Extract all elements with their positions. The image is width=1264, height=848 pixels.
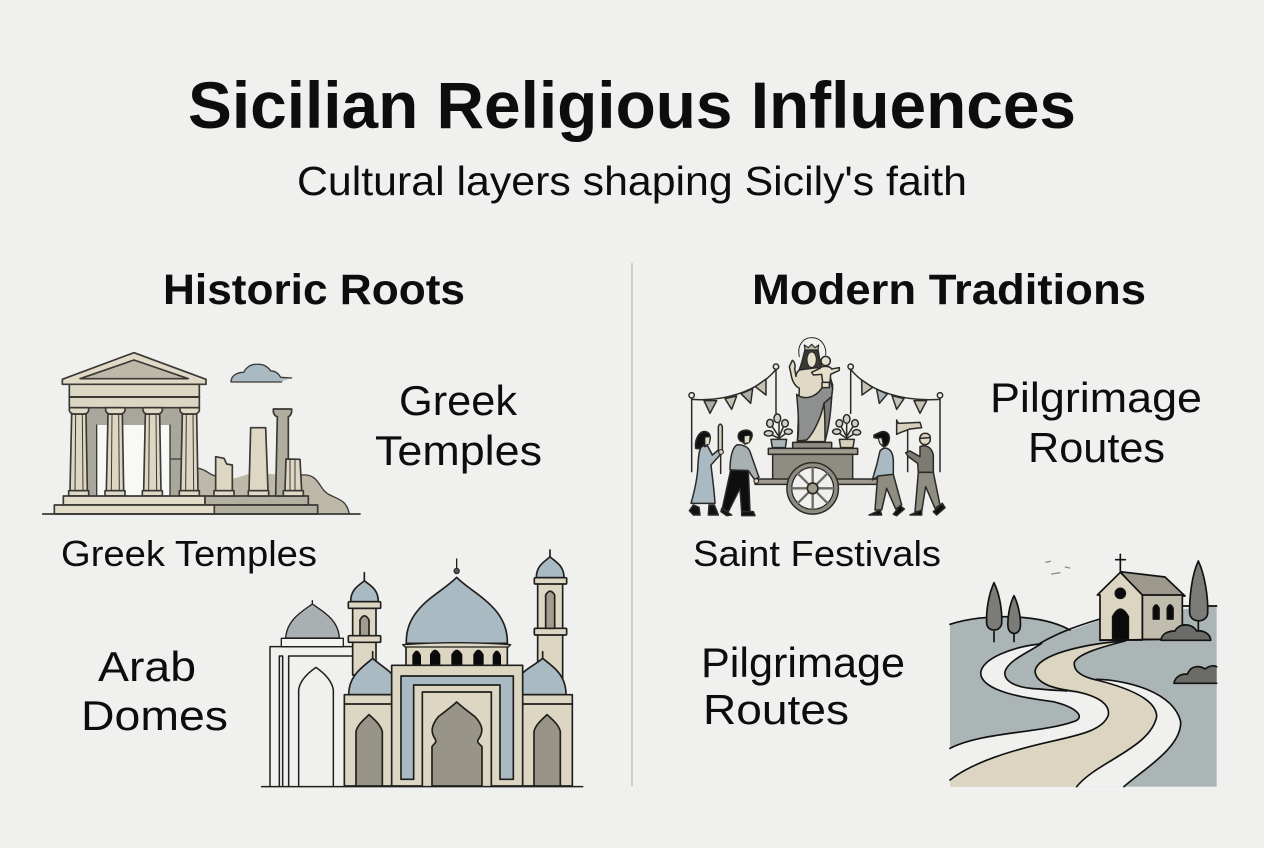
main dome xyxy=(455,559,459,568)
trees left xyxy=(987,583,1020,642)
cart xyxy=(755,442,888,514)
tree right xyxy=(1190,561,1208,632)
label: Greek Temples heading beside temple: Greek xyxy=(399,377,518,424)
man with banner xyxy=(897,420,945,515)
heading: Historic Roots: Historic Roots xyxy=(163,266,465,314)
right minaret xyxy=(534,550,567,680)
label: Pilgrimage Routes lower xyxy=(701,639,905,733)
central portal xyxy=(392,665,523,786)
bushes xyxy=(1161,625,1211,640)
caption: Saint Festivals: Saint Festivals xyxy=(693,533,941,574)
man pulling cart left xyxy=(721,430,759,516)
land xyxy=(950,605,1217,787)
label: Pilgrimage Routes top right: Pilgrimage xyxy=(990,374,1202,421)
winding paths xyxy=(950,641,1181,787)
side wings xyxy=(344,695,394,786)
icon: Greek temple and ruins xyxy=(43,353,360,514)
label: Greek Temples heading beside temple xyxy=(375,377,542,474)
icon: Arab domed mosque xyxy=(262,550,583,787)
label: Arab Domes: Domes xyxy=(81,692,228,739)
label: Pilgrimage Routes top right: Routes xyxy=(1028,424,1165,471)
icon: saint festival procession xyxy=(689,338,945,516)
flowers right xyxy=(833,415,861,448)
label: Greek Temples heading beside temple: Temples xyxy=(375,427,542,474)
title: Sicilian Religious Influences xyxy=(188,68,1076,142)
bunting right xyxy=(848,364,943,472)
label: Pilgrimage Routes lower: Routes xyxy=(703,686,849,733)
flowers left xyxy=(764,414,792,448)
caption: Greek Temples: Greek Temples xyxy=(61,533,317,574)
label: Arab Domes: Arab xyxy=(98,643,196,690)
statue of Madonna and child xyxy=(789,338,839,442)
man pulling cart right xyxy=(869,432,904,516)
icon: pilgrimage road and hilltop church xyxy=(950,554,1217,787)
subtitle: Cultural layers shaping Sicily's faith xyxy=(297,158,967,204)
heading: Modern Traditions: Modern Traditions xyxy=(752,266,1146,314)
label: Arab Domes xyxy=(81,643,228,739)
label: Pilgrimage Routes top right xyxy=(990,374,1202,471)
birds xyxy=(1046,561,1070,574)
side domes xyxy=(370,652,375,658)
church xyxy=(1097,554,1185,640)
bunting left xyxy=(689,364,779,472)
woman with candle xyxy=(689,424,723,515)
left minaret xyxy=(348,573,381,675)
label: Pilgrimage Routes lower: Pilgrimage xyxy=(701,639,905,686)
